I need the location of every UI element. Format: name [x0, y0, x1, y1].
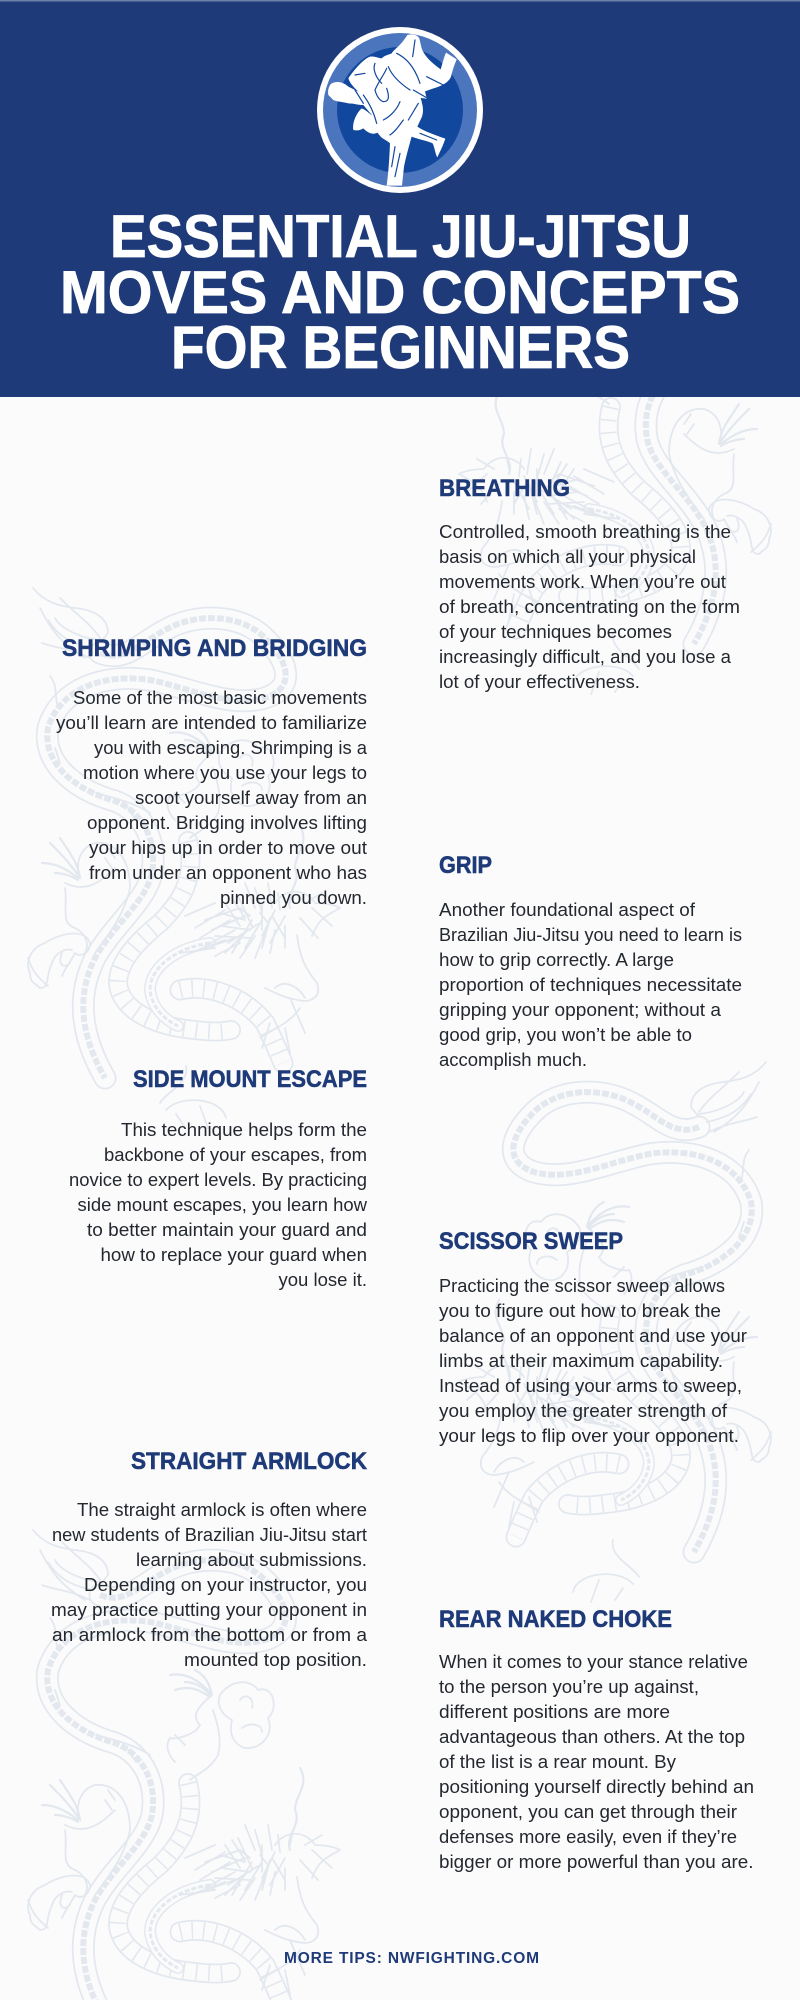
section: straight armlock [51, 1448, 368, 1670]
text: side mount body: how to replace your guard when [100, 1245, 367, 1265]
text: shrimping body: your hips up in order to move out [89, 838, 367, 858]
text: scissor sweep body: limbs at their maximum capability. [439, 1351, 723, 1371]
text: shrimping body: scoot yourself away from an [135, 788, 367, 808]
text: rear naked choke body [439, 1652, 754, 1872]
text: breathing body: lot of your effectiveness. [439, 672, 640, 692]
section: grip [439, 852, 742, 1070]
text: rear naked choke body: opponent, you can get through their [439, 1802, 737, 1822]
text: shrimping body: Some of the most basic movements [73, 688, 367, 708]
text: grip body: good grip, you won’t be able to [439, 1025, 692, 1045]
dragon watermark: upper left [28, 588, 340, 1128]
text: straight armlock body: Depending on your instructor, you [84, 1575, 367, 1595]
text: shrimping body: opponent. Bridging involves lifting [87, 813, 367, 833]
section: side mount escape [69, 1066, 368, 1290]
text: shrimping body [56, 688, 368, 908]
text: grip body: Another foundational aspect of [439, 900, 696, 920]
heading: scissor sweep: SCISSOR SWEEP [439, 1228, 623, 1255]
heading: breathing: BREATHING [439, 475, 570, 502]
text: scissor sweep body: you employ the greater strength of [439, 1401, 728, 1421]
text: shrimping body: pinned you down. [220, 888, 367, 908]
text: breathing body: of your techniques becomes [439, 622, 672, 642]
section: shrimping and bridging [56, 635, 368, 908]
section: rear naked choke [439, 1606, 754, 1872]
text: straight armlock body: an armlock from the bottom or from a [52, 1625, 368, 1645]
text: grip body: accomplish much. [439, 1050, 587, 1070]
heading: shrimping and bridging: SHRIMPING AND BRIDGING [62, 635, 367, 662]
text: grip body: Brazilian Jiu-Jitsu you need to learn is [439, 925, 742, 945]
text: rear naked choke body: defenses more easily, even if they’re [439, 1827, 737, 1847]
text: shrimping body: motion where you use your legs to [83, 763, 367, 783]
text: breathing body: Controlled, smooth breathing is the [439, 522, 731, 542]
heading: grip: GRIP [439, 852, 492, 879]
text: breathing body: of breath, concentrating on the form [439, 597, 740, 617]
text: side mount body: backbone of your escapes, from [104, 1145, 367, 1165]
text: breathing body: movements work. When you’re out [439, 572, 726, 592]
text: scissor sweep body: your legs to flip over your opponent. [439, 1426, 739, 1446]
heading: rear naked choke: REAR NAKED CHOKE [439, 1606, 672, 1633]
text: straight armlock body: may practice putting your opponent in [51, 1600, 367, 1620]
dragon watermark: middle right [459, 1062, 771, 1602]
text: breathing body: basis on which all your physical [439, 547, 696, 567]
text: rear naked choke body: different positions are more [439, 1702, 670, 1722]
text: shrimping body: you with escaping. Shrimping is a [94, 738, 368, 758]
footer: more tips link text: MORE TIPS: NWFIGHTING.COM [284, 1950, 539, 1967]
dragon watermark: bottom left [28, 1530, 340, 2000]
text: scissor sweep body: balance of an opponent and use your [439, 1326, 747, 1346]
text: grip body: how to grip correctly. A large [439, 950, 674, 970]
text: grip body: gripping your opponent; without a [439, 1000, 722, 1020]
text: side mount body: you lose it. [278, 1270, 367, 1290]
text: rear naked choke body: bigger or more powerful than you are. [439, 1852, 754, 1872]
title [60, 203, 740, 381]
text: straight armlock body: learning about submissions. [136, 1550, 367, 1570]
text: rear naked choke body: advantageous than others. At the top [439, 1727, 745, 1747]
logo: grappling figures in circle [317, 27, 483, 193]
text: breathing body [439, 522, 740, 692]
section: breathing [439, 475, 740, 692]
text: breathing body: increasingly difficult, and you lose a [439, 647, 732, 667]
text: scissor sweep body: Practicing the scissor sweep allows [439, 1276, 725, 1296]
text: grip body [439, 900, 742, 1070]
text: grip body: proportion of techniques necessitate [439, 975, 742, 995]
text: side mount body [69, 1120, 368, 1290]
text: straight armlock body: The straight armlock is often where [77, 1500, 367, 1520]
text: straight armlock body: mounted top position. [184, 1650, 367, 1670]
text: scissor sweep body [439, 1276, 747, 1446]
text: side mount body: side mount escapes, you learn how [78, 1195, 368, 1215]
text: scissor sweep body: you to figure out how to break the [439, 1301, 721, 1321]
text: rear naked choke body: When it comes to your stance relative [439, 1652, 748, 1672]
text: shrimping body: from under an opponent who has [89, 863, 367, 883]
heading: side mount escape: SIDE MOUNT ESCAPE [133, 1066, 367, 1093]
text: rear naked choke body: to the person you’re up against, [439, 1677, 699, 1697]
title: FOR BEGINNERS [171, 314, 630, 381]
title: ESSENTIAL JIU-JITSU [110, 203, 691, 270]
text: shrimping body: you’ll learn are intended to familiarize [56, 713, 367, 733]
header banner [0, 0, 800, 397]
section: scissor sweep [439, 1228, 747, 1446]
dragon watermark: top right [459, 154, 771, 694]
text: side mount body: to better maintain your guard and [87, 1220, 367, 1240]
text: scissor sweep body: Instead of using your arms to sweep, [439, 1376, 742, 1396]
heading: straight armlock: STRAIGHT ARMLOCK [131, 1448, 367, 1475]
text: side mount body: novice to expert levels. By practicing [69, 1170, 367, 1190]
text: rear naked choke body: of the list is a rear mount. By [439, 1752, 676, 1772]
text: rear naked choke body: positioning yourself directly behind an [439, 1777, 754, 1797]
title: MOVES AND CONCEPTS [60, 259, 740, 326]
text: side mount body: This technique helps form the [121, 1120, 367, 1140]
text: straight armlock body [51, 1500, 368, 1670]
text: straight armlock body: new students of Brazilian Jiu-Jitsu start [52, 1525, 367, 1545]
